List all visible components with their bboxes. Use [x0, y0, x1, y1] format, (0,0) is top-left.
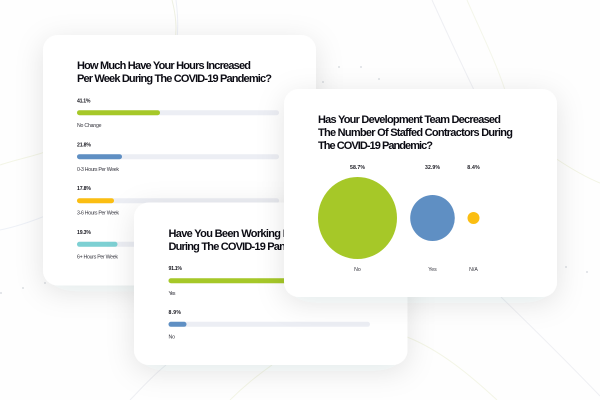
bar row: no: 8.9% [168, 310, 181, 316]
heading: staffed contractors: Has Your Development Team Decreased [318, 114, 501, 126]
heading: hours increased: How Much Have Your Hours Increased [77, 60, 251, 72]
bubble: n/a: 8.4% [467, 165, 480, 171]
bar row: no [168, 310, 370, 340]
bubble: yes: Yes [428, 267, 437, 273]
bar row: no change: 41.1% [77, 98, 91, 104]
bubble: n/a: N/A [469, 267, 478, 273]
bubble: no: No [354, 267, 361, 273]
bar row: 3-6 hours: 3-6 Hours Per Week [77, 211, 119, 217]
heading: working from home: Have You Been Working From Home [168, 228, 338, 240]
heading: staffed contractors: The Number Of Staffed Contractors During [318, 127, 513, 139]
bubble: no: 58.7% [350, 165, 365, 171]
heading: hours increased [77, 60, 272, 85]
bar row: yes [168, 266, 370, 297]
heading: hours increased: Per Week During The COVID-19 Pandemic? [77, 73, 272, 85]
bar row: 0-3 hours: 21.8% [77, 142, 91, 148]
panel: staffed contractors [284, 89, 557, 297]
bubble: n/a [467, 165, 480, 273]
bar row: 3-6 hours [77, 186, 279, 217]
heading: working from home: During The COVID-19 Pandemic? [168, 241, 320, 253]
bar row: 0-3 hours [77, 142, 279, 173]
bubble: no [318, 165, 397, 273]
bar row: 3-6 hours: 17.8% [77, 186, 91, 192]
bar row: 6+ hours [77, 230, 279, 260]
bar row: yes: Yes [168, 291, 176, 297]
bar row: 0-3 hours: 0-3 Hours Per Week [77, 167, 119, 173]
bubble: yes: 32.9% [425, 165, 440, 171]
panel: working from home [134, 202, 408, 365]
bar row: yes: 91.1% [168, 266, 182, 272]
bar row: no change: No Change [77, 123, 102, 129]
panel: hours increased per week [43, 35, 316, 286]
bar row: no change [77, 98, 279, 129]
bubble: yes [410, 165, 455, 273]
heading: working from home [168, 228, 338, 253]
heading: staffed contractors: The COVID-19 Pandemic? [318, 140, 433, 152]
bar row: 6+ hours: 19.3% [77, 230, 91, 236]
heading: staffed contractors [318, 114, 513, 152]
bar row: 6+ hours: 6+ Hours Per Week [77, 254, 118, 260]
bar row: no: No [168, 334, 175, 340]
